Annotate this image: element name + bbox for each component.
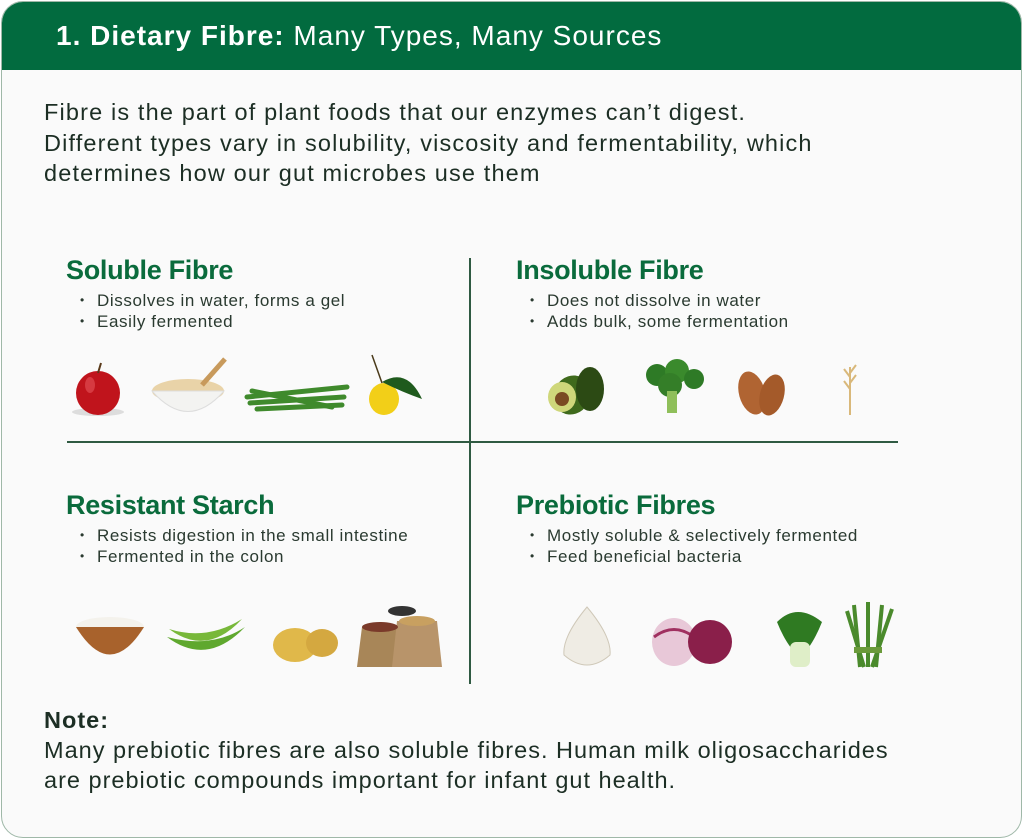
bullets: resistant starch: Fermented in the colon: [97, 547, 284, 566]
header bar: [2, 2, 1021, 70]
icons: insoluble foods: [548, 359, 857, 416]
bullets: insoluble: [530, 291, 789, 331]
note: are prebiotic compounds important for infant gut health.: [44, 767, 676, 793]
icons: resistant starch foods: [76, 606, 442, 667]
intro text: [44, 99, 813, 186]
header bar: 1. Dietary Fibre: Many Types, Many Sources: [56, 20, 662, 51]
intro text: determines how our gut microbes use them: [44, 160, 541, 186]
bullets: prebiotic: Feed beneficial bacteria: [547, 547, 742, 566]
heading: resistant starch: Resistant Starch: [66, 490, 274, 520]
bullets: insoluble: Adds bulk, some fermentation: [547, 312, 789, 331]
heading: prebiotic fibres: Prebiotic Fibres: [516, 490, 715, 520]
heading: insoluble fibre: Insoluble Fibre: [516, 255, 704, 285]
bullets: soluble: Easily fermented: [97, 312, 233, 331]
note: Many prebiotic fibres are also soluble fibres. Human milk oligosaccharides: [44, 737, 889, 763]
bullets: insoluble: Does not dissolve in water: [547, 291, 761, 310]
intro text: Fibre is the part of plant foods that our enzymes can’t digest.: [44, 99, 746, 125]
bullets: resistant starch: [80, 526, 408, 566]
note: Note:: [44, 707, 109, 733]
note: [44, 707, 889, 793]
divider lines: [469, 258, 470, 684]
icons: soluble foods: [72, 354, 422, 416]
bullets: soluble: Dissolves in water, forms a gel: [97, 291, 345, 310]
bullets: prebiotic: Mostly soluble & selectively fermented: [547, 526, 858, 545]
intro text: Different types vary in solubility, viscosity and fermentability, which: [44, 130, 813, 156]
bullets: prebiotic: [530, 526, 858, 566]
icons: prebiotic foods: [563, 602, 894, 668]
bullets: resistant starch: Resists digestion in the small intestine: [97, 526, 408, 545]
heading: soluble fibre: Soluble Fibre: [66, 255, 233, 285]
bullets: soluble: [80, 291, 345, 331]
